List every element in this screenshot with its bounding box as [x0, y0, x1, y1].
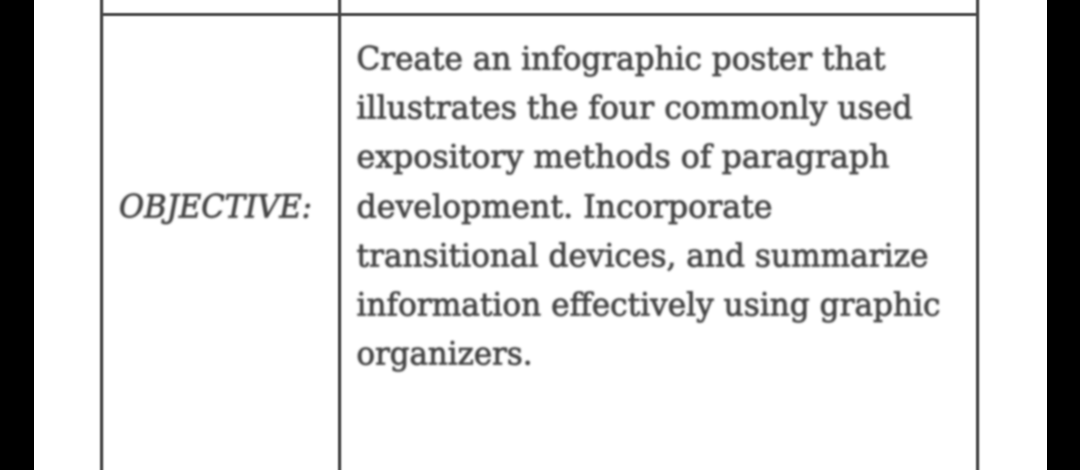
objective description text: expository methods of paragraph	[356, 138, 890, 176]
objective description text: organizers.	[356, 334, 532, 372]
objective description text: development. Incorporate	[356, 188, 772, 226]
label: objective: OBJECTIVE:	[119, 188, 312, 226]
objective description text: Create an infographic poster that	[356, 40, 886, 78]
objective description text: illustrates the four commonly used	[356, 88, 912, 126]
objective description text: transitional devices, and summarize	[356, 236, 928, 274]
objective description text	[356, 40, 940, 372]
objective description text: information effectively using graphic	[356, 286, 940, 324]
